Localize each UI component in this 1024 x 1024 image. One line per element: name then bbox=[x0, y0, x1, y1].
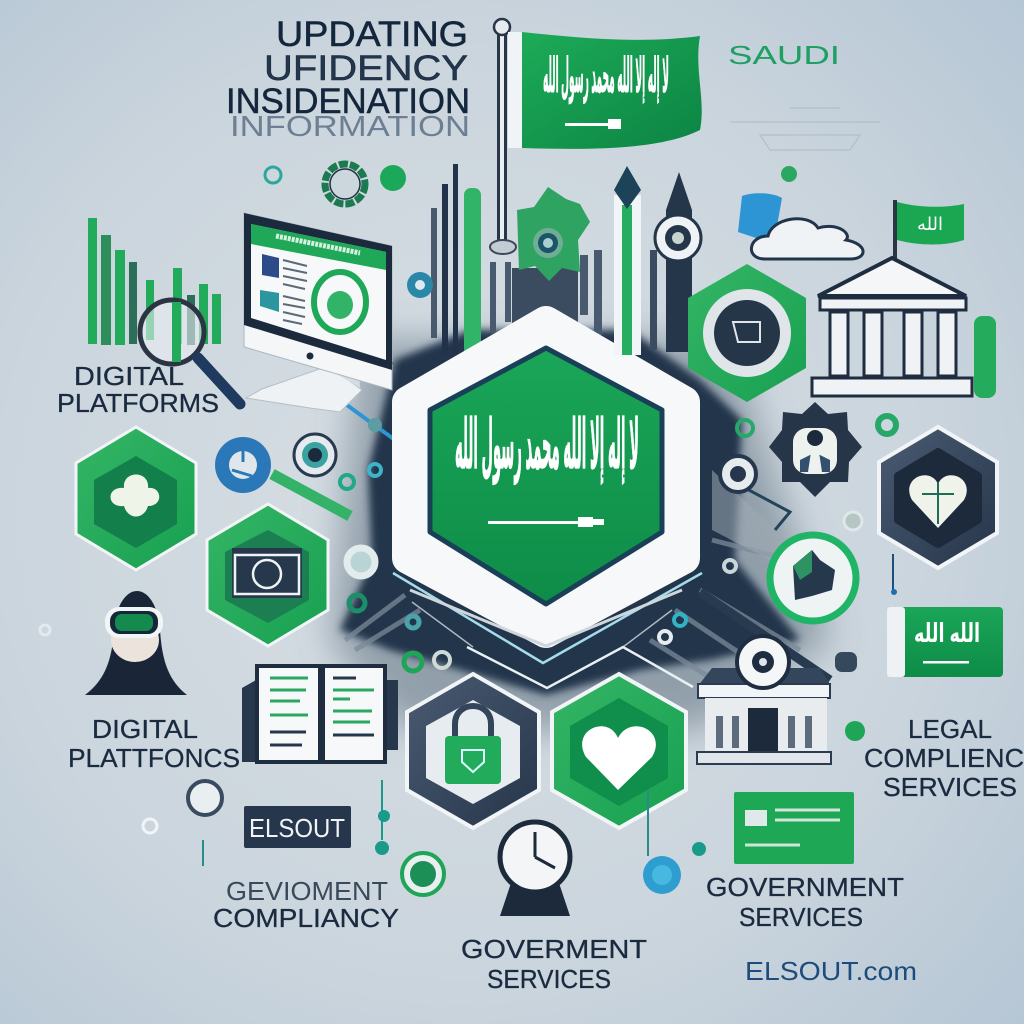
title: UFIDENCY bbox=[264, 49, 468, 88]
label: legal compliance bbox=[864, 714, 1024, 802]
icon: small flag bbox=[893, 200, 964, 266]
icon: green hexagon left bbox=[76, 427, 196, 570]
sword bbox=[488, 517, 604, 527]
icon: green circle globe bbox=[770, 535, 856, 621]
icon: gauge bbox=[188, 781, 222, 866]
icon: green hexagon monitor bbox=[207, 504, 328, 646]
icon: small green flag right bbox=[887, 607, 1003, 677]
icon: person with veil bbox=[85, 591, 187, 695]
central hexagon bbox=[408, 322, 684, 646]
label: goverment services bbox=[461, 934, 647, 994]
text: لا إله إلا الله محمد رسول الله bbox=[543, 50, 669, 104]
text: لا إله إلا الله محمد رسول الله bbox=[455, 406, 639, 485]
label: digital platforms top: PLATFORMS bbox=[57, 388, 219, 418]
label: legal compliance: SERVICES bbox=[883, 772, 1017, 802]
icons: top rings bbox=[265, 164, 797, 204]
icon: blue dot bbox=[643, 790, 706, 894]
green spiky icon bbox=[517, 187, 590, 281]
label: digital platforms top: DIGITAL bbox=[74, 361, 184, 391]
icon: open book bbox=[242, 666, 398, 762]
bar chart bbox=[88, 218, 221, 345]
label: gevioment compliancy: COMPLIANCY bbox=[213, 903, 399, 933]
pen towers bbox=[614, 166, 701, 355]
icon: government building bbox=[812, 258, 996, 398]
label: digital platfoncs bbox=[68, 714, 240, 773]
label: government services right: GOVERNMENT bbox=[706, 872, 904, 902]
label: legal compliance: COMPLIENC bbox=[864, 743, 1024, 773]
icon: dark hexagon right bbox=[879, 427, 997, 568]
icon: small flag: الله bbox=[917, 214, 943, 234]
title: INFORMATION bbox=[230, 111, 470, 143]
icon: small green flag right: الله الله bbox=[914, 618, 980, 648]
label: digital platforms top bbox=[57, 361, 219, 418]
badge: ELSOUT bbox=[244, 806, 351, 848]
icon: lock hexagon bbox=[407, 674, 539, 828]
icon: blue ring bbox=[215, 434, 350, 516]
small rings right bbox=[659, 416, 897, 643]
icon: small pin bbox=[407, 272, 433, 298]
label: elsout.com: ELSOUT.com bbox=[745, 956, 917, 986]
label: gevioment compliancy bbox=[213, 876, 399, 933]
icon: small building bbox=[697, 636, 865, 764]
title: UPDATING bbox=[276, 15, 468, 54]
icon: green card bbox=[734, 792, 854, 864]
label: digital platfoncs: PLATTFONCS bbox=[68, 743, 240, 773]
label: government services right: SERVICES bbox=[739, 902, 863, 932]
label: goverment services: GOVERMENT bbox=[461, 934, 647, 964]
icon: magnifying glass bbox=[140, 300, 240, 404]
badge: ELSOUT: ELSOUT bbox=[249, 813, 345, 843]
flag: top bbox=[490, 19, 702, 254]
label: gevioment compliancy: GEVIOMENT bbox=[226, 876, 388, 906]
icon: green ring bbox=[375, 780, 444, 895]
icon: dark gear bbox=[769, 402, 862, 497]
icon: green hexagon top right bbox=[688, 264, 806, 402]
title bbox=[226, 15, 470, 143]
label: goverment services: SERVICES bbox=[487, 964, 611, 994]
bars behind centre bbox=[431, 164, 657, 356]
icon: computer monitor bbox=[244, 213, 392, 412]
label: SAUDI: SAUDI bbox=[728, 40, 840, 70]
faint sketch top right bbox=[730, 108, 880, 150]
icon: heart hexagon bbox=[552, 674, 686, 828]
circuit backdrop behind centre bbox=[330, 330, 830, 730]
label: legal compliance: LEGAL bbox=[908, 714, 992, 744]
title: INSIDENATION bbox=[226, 82, 470, 121]
icon: cloud bbox=[738, 193, 863, 259]
label: digital platfoncs: DIGITAL bbox=[92, 714, 198, 744]
label: government services right bbox=[706, 872, 904, 932]
icon: clock bbox=[500, 822, 570, 916]
small rings left bbox=[40, 418, 450, 833]
